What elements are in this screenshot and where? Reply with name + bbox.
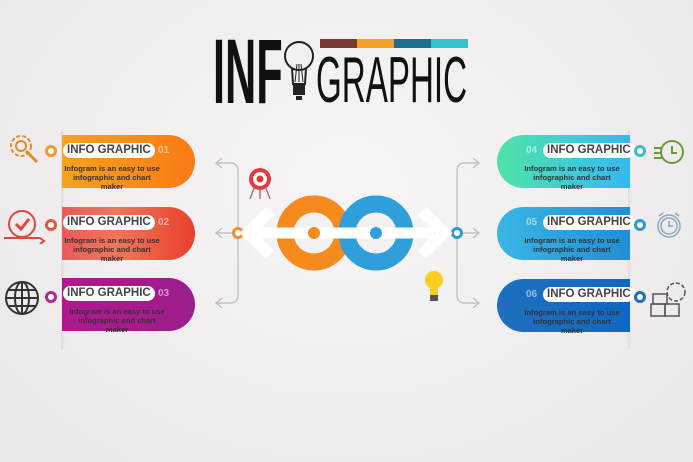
- icon: gear boxes: [650, 282, 686, 317]
- right vertical line: [628, 130, 632, 350]
- title: GRAPHIC: GRAPHIC: [316, 43, 467, 116]
- icon: target: [249, 168, 271, 200]
- panel 03: [62, 278, 195, 331]
- right bracket: [456, 158, 480, 308]
- panel 03: 03: [158, 288, 169, 299]
- panel 06: [497, 279, 630, 332]
- panel 01: [62, 135, 195, 188]
- icon: bulb: [284, 41, 314, 100]
- panel 06: 06: [526, 289, 537, 300]
- panel 05: [497, 207, 630, 260]
- dots left: [45, 145, 57, 157]
- panel 05: 05: [526, 217, 537, 228]
- title: INF: INF: [213, 21, 283, 123]
- color bar: [320, 39, 468, 48]
- icon: clock check: [4, 210, 46, 244]
- panel 01: Infogram is an easy to use infographic and chart maker: [64, 164, 160, 191]
- icon: globe: [5, 281, 39, 315]
- dots right: [634, 145, 646, 157]
- panel 04: 04: [526, 145, 537, 156]
- panel 05: Infogram is an easy to use infographic and chart maker: [524, 236, 620, 263]
- panel 04: Infogram is an easy to use infographic and chart maker: [524, 164, 620, 191]
- center infinity: [240, 196, 452, 270]
- panel 02: INFO GRAPHIC: [67, 216, 151, 228]
- left bracket: [215, 158, 239, 308]
- panel 06: INFO GRAPHIC: [547, 288, 631, 300]
- icon: lightbulb: [425, 271, 443, 301]
- icon: alarm clock: [657, 212, 681, 238]
- panel 04: INFO GRAPHIC: [547, 144, 631, 156]
- panel 06: Infogram is an easy to use infographic and chart maker: [524, 308, 620, 335]
- panel 03: Infogram is an easy to use infographic and chart maker: [69, 307, 165, 334]
- panel 02: [62, 207, 195, 260]
- icon: fast clock: [654, 140, 684, 164]
- panel 03: INFO GRAPHIC: [67, 287, 151, 299]
- panel 01: INFO GRAPHIC: [67, 144, 151, 156]
- panel 02: Infogram is an easy to use infographic and chart maker: [64, 236, 160, 263]
- left vertical line: [61, 130, 65, 350]
- icon: gear: [10, 135, 38, 163]
- panel 01: 01: [158, 145, 169, 156]
- panel 04: [497, 135, 630, 188]
- panel 02: 02: [158, 217, 169, 228]
- panel 05: INFO GRAPHIC: [547, 216, 631, 228]
- title: [213, 21, 468, 123]
